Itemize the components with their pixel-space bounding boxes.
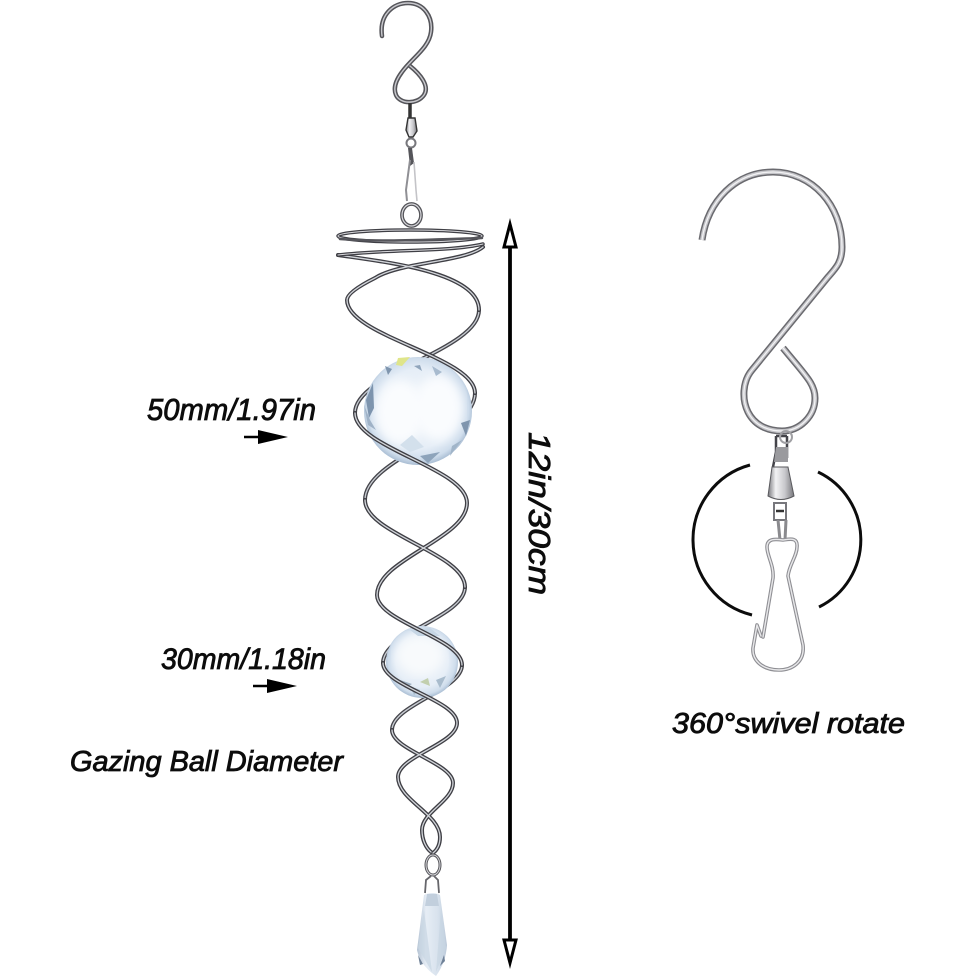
large swivel connector <box>768 431 794 540</box>
height dimension arrow <box>504 224 516 963</box>
rotation arc: right <box>818 472 861 607</box>
large S hook <box>702 172 842 431</box>
small ring <box>402 204 421 226</box>
small swivel and clasp <box>406 103 417 201</box>
label: gazing ball diameter: Gazing Ball Diameter <box>70 746 344 778</box>
spiral front strands <box>338 247 483 853</box>
spiral rear strands <box>355 310 479 730</box>
small crystal ball <box>386 626 458 698</box>
label: 50mm ball size: 50mm/1.97in <box>147 392 316 427</box>
small S hook <box>382 3 431 102</box>
crystal drop <box>417 876 447 976</box>
large crystal ball <box>364 357 472 465</box>
label: swivel rotate: 360°swivel rotate <box>672 708 905 740</box>
bottom ring <box>426 855 440 875</box>
spiral top coil <box>338 230 483 255</box>
label: 30mm ball size: 30mm/1.18in <box>161 643 326 676</box>
rotation arc: left <box>693 465 752 615</box>
arrow: points to large ball <box>244 430 288 444</box>
height label: 12in/30cm <box>522 432 557 595</box>
large snap clasp <box>753 539 803 670</box>
arrow: points to small ball <box>253 679 297 693</box>
